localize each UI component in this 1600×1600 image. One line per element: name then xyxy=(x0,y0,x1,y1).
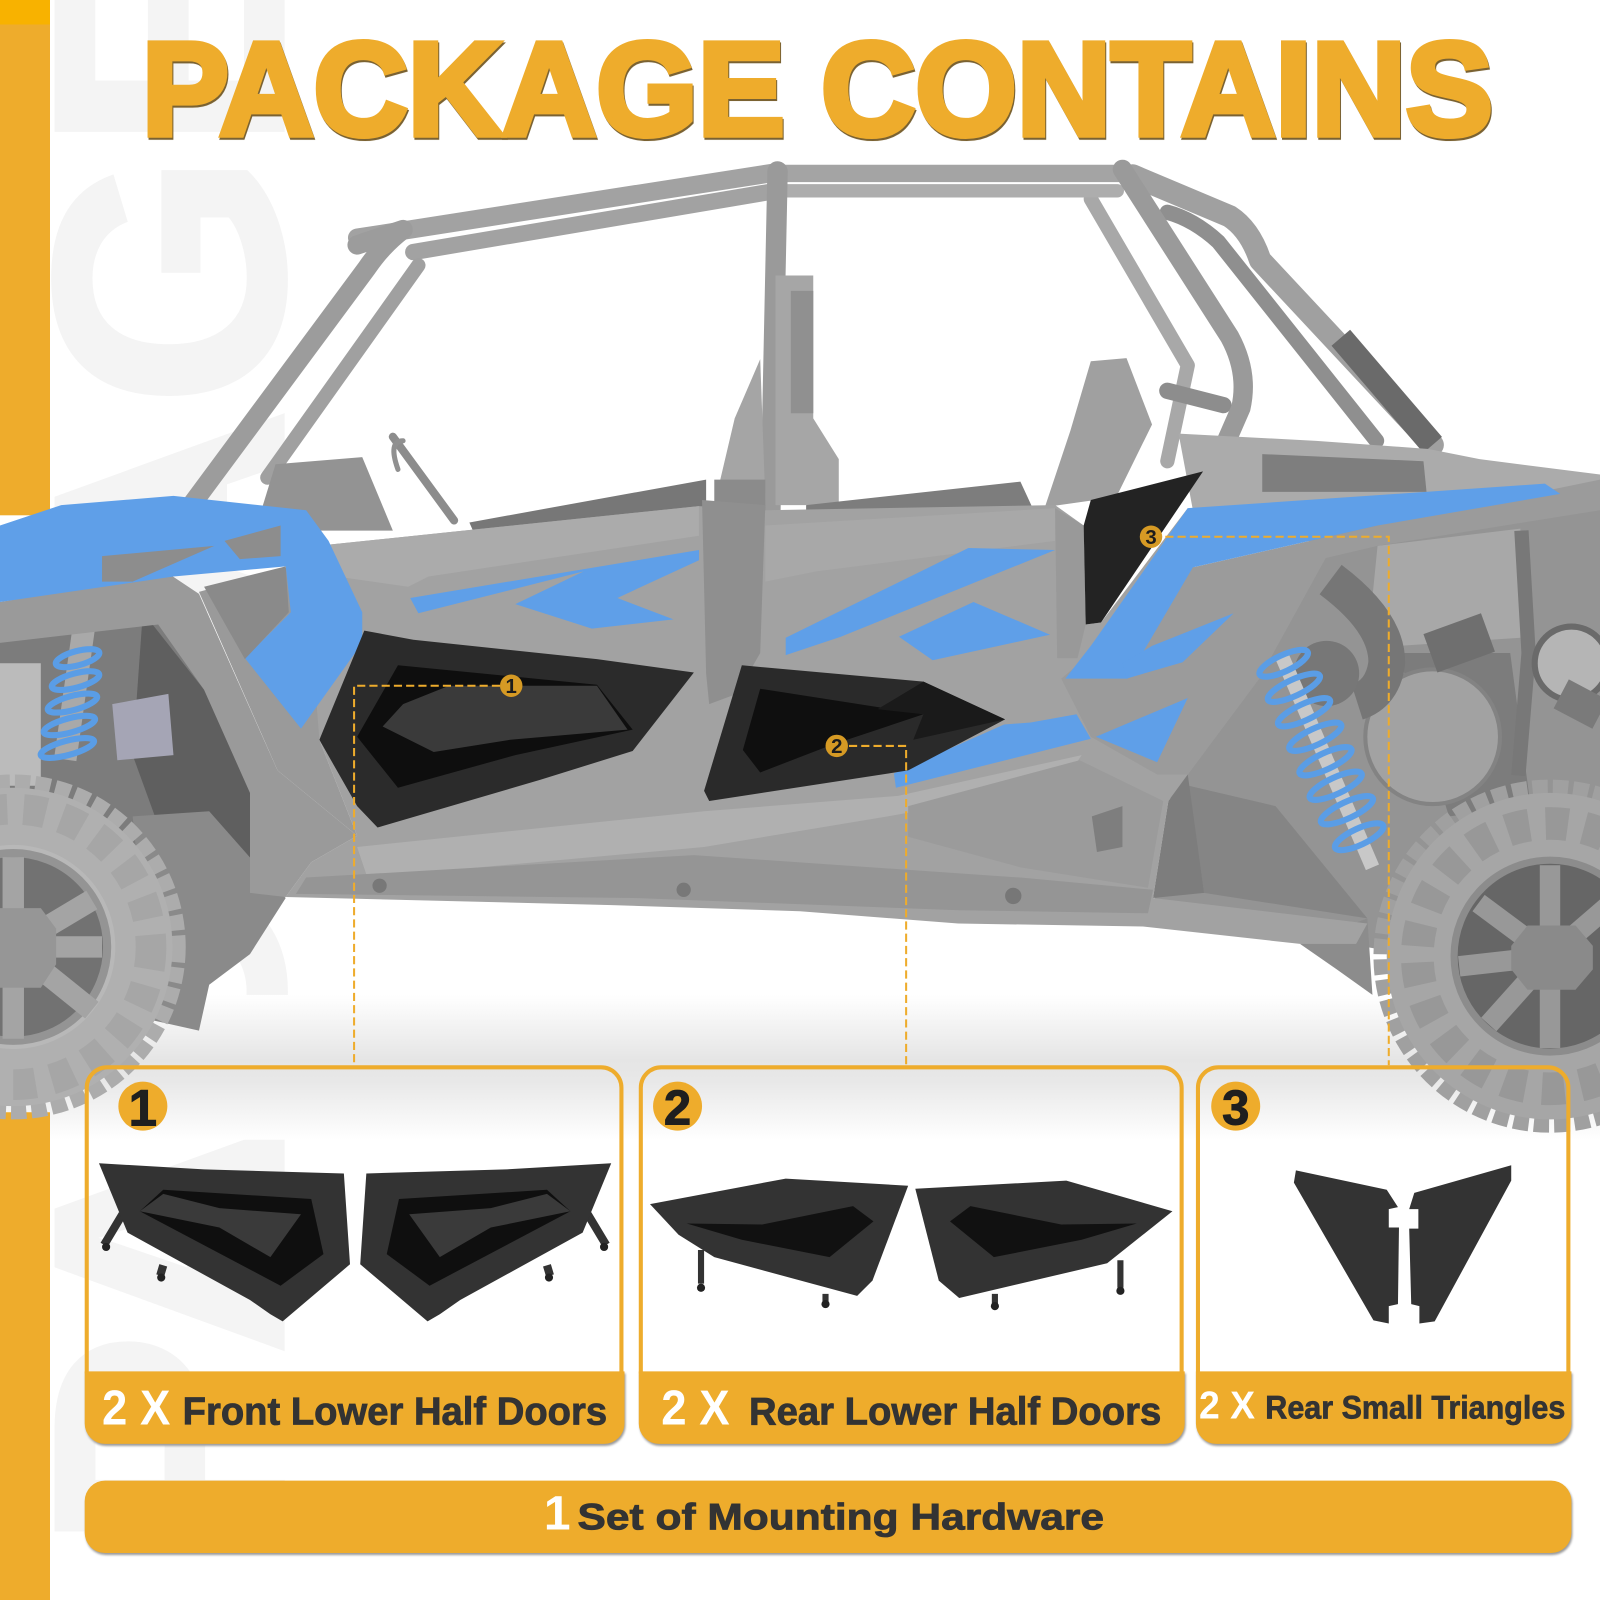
body filler behind front fender xyxy=(199,551,357,836)
rear tyre behind xyxy=(1300,918,1372,995)
callout marker 3 xyxy=(1140,526,1162,549)
front wheel xyxy=(0,783,178,1111)
front tyre rear section xyxy=(133,811,286,1031)
rear wheel xyxy=(1382,788,1600,1124)
caption bar 2: 2 X xyxy=(661,1381,730,1435)
highlighted part: rear triangle xyxy=(1084,471,1203,624)
number badge 2 xyxy=(653,1081,702,1135)
callout marker 2: 2 xyxy=(831,736,842,758)
front dash and door opening xyxy=(255,457,1033,546)
part: right rear door xyxy=(915,1181,1172,1310)
callout marker 1 xyxy=(500,674,522,698)
part: left rear door xyxy=(650,1179,908,1308)
number badge 2: 2 xyxy=(664,1081,691,1135)
caption bar 3: Rear Small Triangles xyxy=(1265,1388,1565,1425)
caption bar 1: 2 X xyxy=(102,1381,171,1435)
hardware bar xyxy=(85,1481,1571,1553)
callout marker 3: 3 xyxy=(1145,527,1157,549)
number badge 3 xyxy=(1211,1081,1260,1135)
callout marker 1: 1 xyxy=(506,676,517,698)
number badge 3: 3 xyxy=(1222,1081,1249,1135)
number badge 1: 1 xyxy=(129,1080,157,1137)
caption bar 2: Rear Lower Half Doors xyxy=(749,1390,1161,1433)
vehicle illustration xyxy=(0,169,1600,1124)
part: right front door xyxy=(360,1163,611,1321)
caption bar 2 xyxy=(639,1371,1185,1444)
callout marker 2 xyxy=(826,735,848,758)
part: right triangle xyxy=(1409,1165,1511,1323)
floor shadow xyxy=(0,995,1600,1140)
caption bar 1 xyxy=(85,1371,624,1444)
rear fender blue panels xyxy=(894,484,1560,788)
main body shell xyxy=(286,505,1367,944)
hardware bar: Set of Mounting Hardware xyxy=(578,1497,1104,1538)
engine bay xyxy=(1153,500,1600,949)
front hood blue panels xyxy=(0,496,362,729)
caption bar 1: Front Lower Half Doors xyxy=(183,1390,607,1433)
part: left front door xyxy=(99,1163,350,1321)
caption bar 3 xyxy=(1196,1371,1571,1444)
callout leader lines xyxy=(354,537,1389,1065)
highlighted part: front lower door xyxy=(319,631,694,828)
front fender arch xyxy=(0,573,357,897)
door graphics blue xyxy=(410,548,1055,660)
left accent stripe xyxy=(0,0,50,1600)
panel 3: rear small triangles xyxy=(1196,1067,1571,1444)
title: PACKAGE CONTAINS xyxy=(142,16,1493,164)
part: left triangle xyxy=(1294,1170,1399,1323)
hardware bar: 1 xyxy=(544,1488,571,1541)
panel 1: front lower half doors xyxy=(85,1067,624,1444)
caption bar 3: 2 X xyxy=(1199,1384,1255,1427)
rear suspension coil xyxy=(1256,645,1387,867)
seats and centre post xyxy=(714,276,1152,507)
panel 2: rear lower half doors xyxy=(639,1067,1185,1444)
front wheel well xyxy=(0,602,265,898)
roll cage xyxy=(190,169,1433,520)
highlighted part: rear lower door xyxy=(704,665,1005,801)
door and rocker shading xyxy=(296,500,1204,913)
rear deck xyxy=(1179,434,1600,531)
rear fender grey panel xyxy=(1061,480,1600,774)
number badge 1 xyxy=(118,1080,167,1137)
